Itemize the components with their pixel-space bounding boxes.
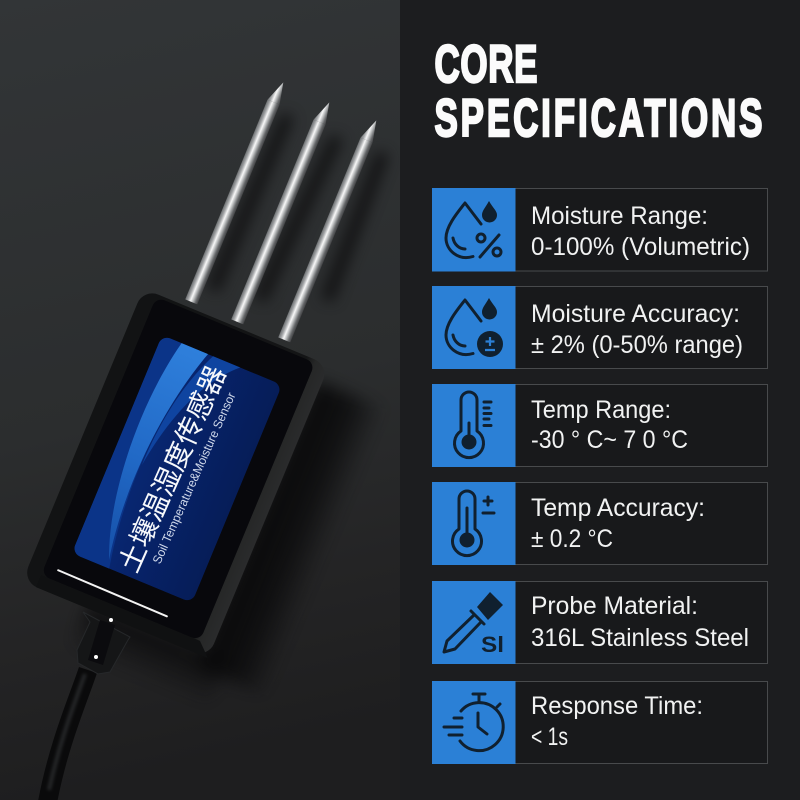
connector dot top bbox=[109, 618, 113, 622]
icon: droplet plus minus bbox=[446, 298, 503, 357]
chinese product name: 土壤温湿度传感器 bbox=[113, 361, 232, 577]
probe material text: Probe Material: bbox=[531, 592, 698, 620]
panel: response time bbox=[432, 681, 768, 764]
row box bbox=[432, 582, 768, 664]
right panel background bbox=[400, 0, 800, 800]
blue icon tile bbox=[432, 482, 516, 565]
row box bbox=[432, 188, 768, 271]
icon: droplet percent bbox=[446, 201, 501, 258]
black face bbox=[41, 297, 315, 641]
probe shadows bbox=[213, 115, 383, 300]
three steel probes bbox=[185, 79, 381, 342]
blue icon tile bbox=[432, 681, 516, 764]
panel: probe material bbox=[432, 581, 768, 664]
moisture range text: Moisture Range: bbox=[531, 202, 708, 230]
bottom lip bbox=[36, 575, 213, 658]
row box bbox=[432, 384, 768, 466]
probe 2 bbox=[231, 99, 334, 324]
response time value: < 1s bbox=[531, 723, 568, 751]
blue icon tile bbox=[432, 581, 516, 664]
cable highlight bbox=[49, 674, 85, 790]
icon: thermometer plus minus bbox=[453, 491, 494, 556]
left background bbox=[0, 0, 400, 800]
title line 1: CORE bbox=[434, 33, 537, 94]
row box bbox=[432, 286, 768, 368]
housing bbox=[22, 288, 329, 658]
panel: temp range bbox=[432, 384, 768, 467]
connector dot bottom bbox=[94, 655, 98, 659]
icon: thermometer bbox=[455, 392, 491, 458]
cable connector bbox=[77, 612, 130, 674]
device shadow bbox=[70, 333, 386, 726]
panel: moisture accuracy bbox=[432, 286, 768, 369]
moisture accuracy text: Moisture Accuracy: bbox=[531, 300, 740, 328]
bright swoosh bbox=[109, 343, 208, 560]
blue icon tile bbox=[432, 384, 516, 467]
probe 3 bbox=[278, 117, 381, 342]
title line 2: SPECIFICATIONS bbox=[434, 87, 763, 148]
probe 1 bbox=[185, 79, 288, 304]
response time text: Response Time: bbox=[531, 692, 703, 720]
blue label screen bbox=[71, 331, 284, 605]
icon: probe with Si mark bbox=[444, 592, 504, 657]
icon: stopwatch bbox=[444, 694, 503, 751]
temp range text: Temp Range: bbox=[531, 396, 671, 424]
cable bbox=[47, 670, 88, 800]
english product name: Soil Temperature&Moisture Sensor bbox=[150, 390, 238, 566]
temp accuracy text: Temp Accuracy: bbox=[531, 494, 705, 522]
moisture range value: 0-100% (Volumetric) bbox=[531, 233, 750, 261]
connector center bbox=[88, 620, 115, 665]
blue icon tile bbox=[432, 188, 516, 272]
title bbox=[434, 33, 763, 148]
panel: moisture range bbox=[432, 188, 768, 272]
temp accuracy value: ± 0.2 °C bbox=[531, 525, 613, 553]
sensor body bbox=[22, 288, 329, 658]
icon: probe with Si mark: Sl bbox=[481, 632, 504, 657]
panel: temp accuracy bbox=[432, 482, 768, 565]
moisture accuracy value: ± 2% (0-50% range) bbox=[531, 331, 743, 359]
temp range value: -30 ° C~ 7 0 °C bbox=[531, 426, 688, 454]
blue icon tile bbox=[432, 286, 516, 369]
probe material value: 316L Stainless Steel bbox=[531, 624, 749, 652]
soft swoosh bbox=[71, 331, 210, 574]
row box bbox=[432, 482, 768, 564]
lighter upper swoosh bbox=[142, 356, 240, 464]
screen highlight bbox=[58, 570, 167, 616]
row box bbox=[432, 682, 768, 764]
